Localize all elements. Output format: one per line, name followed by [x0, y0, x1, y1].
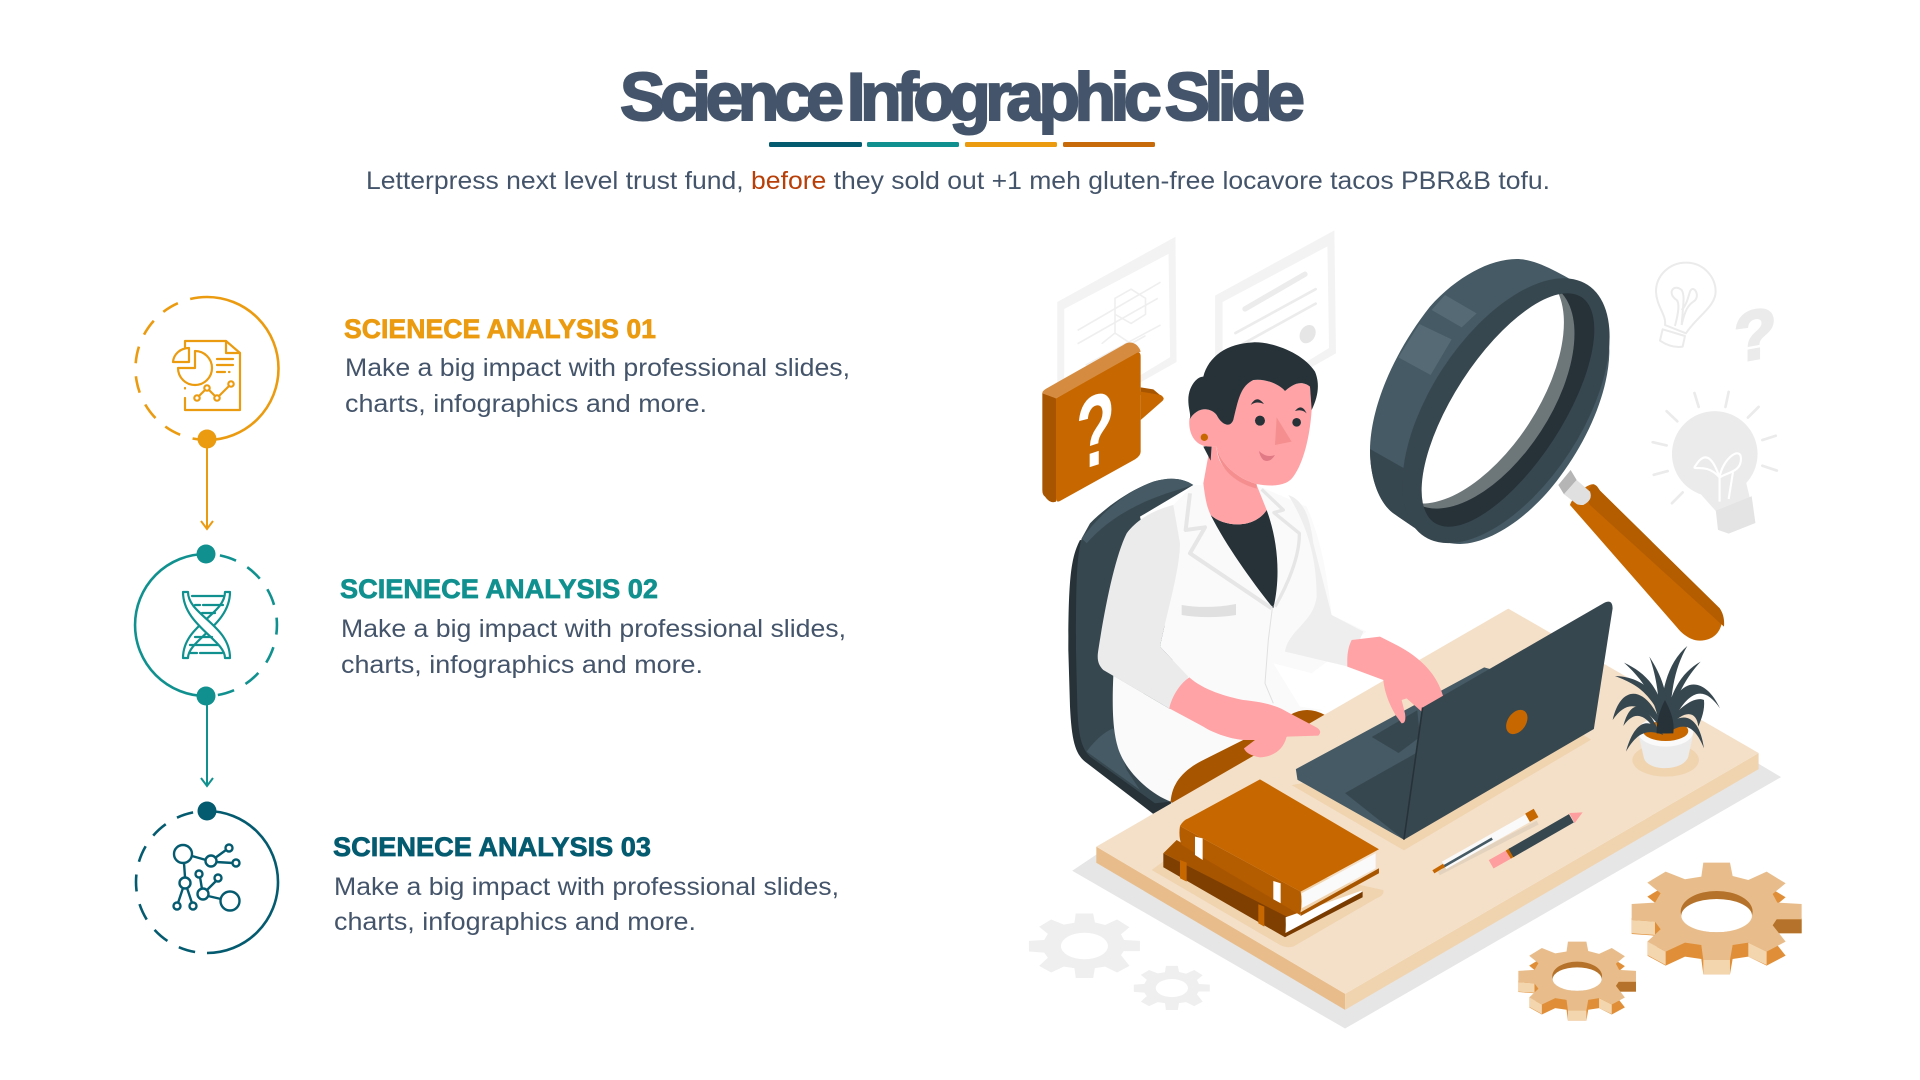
shirt: [1211, 510, 1278, 608]
right sleeve: [1285, 495, 1363, 667]
lens: [1422, 293, 1594, 527]
subtitle: Letterpress next level trust fund, before they sold out +1 meh gluten-free locavore tacos PBR&B tofu.: [366, 167, 1550, 195]
icon: network nodes: [174, 844, 240, 910]
books shadow: [1152, 847, 1384, 947]
metal connector light: [1564, 480, 1591, 505]
pocket: [1182, 604, 1236, 617]
wall frame with certificate: [1215, 230, 1336, 421]
title: Science Infographic Slide: [620, 59, 1305, 135]
arrow 2: [201, 702, 213, 786]
plant: [1613, 646, 1720, 777]
gray question mark: ?: [1734, 292, 1777, 377]
step 1 circle: [136, 297, 278, 448]
orange gear large: [1632, 863, 1802, 974]
neck shadow: [1217, 447, 1257, 489]
body 2: Make a big impact with professional slides,: [341, 615, 846, 643]
laptop screen: [1404, 602, 1613, 840]
face: [1189, 380, 1312, 485]
near hand: [1169, 677, 1320, 757]
title underline bars: [769, 142, 1155, 147]
metal connector: [1558, 470, 1577, 494]
handle shaded side: [1588, 484, 1724, 627]
heading 2: SCIENECE ANALYSIS 02: [340, 574, 658, 604]
outlined light bulb: [1656, 263, 1716, 347]
ring outer: [1370, 259, 1609, 544]
mouth: [1259, 451, 1275, 461]
speech bubble with question mark: [1042, 342, 1164, 502]
gray gear large: [1029, 914, 1140, 978]
center seam: [1265, 608, 1273, 703]
eyes and brows: [1251, 399, 1307, 427]
icon: report document with pie chart: [173, 341, 240, 410]
neck: [1203, 447, 1267, 524]
step 2 circle: [135, 544, 277, 706]
top book: [1179, 779, 1379, 916]
left sleeve: [1098, 505, 1188, 709]
chair seat and legs: [1171, 710, 1325, 803]
magnifying glass: [1370, 259, 1724, 641]
scientist body: [1098, 342, 1367, 803]
orange gear small: [1518, 942, 1636, 1021]
ring front face: [1361, 243, 1651, 578]
speech bubble with question mark: ?: [1076, 368, 1115, 494]
ring lower shade: [1370, 449, 1417, 529]
handle: [1570, 484, 1722, 641]
gray gear small: [1134, 966, 1210, 1010]
illustration: scientist at desk: [1029, 230, 1802, 1029]
body 1 line 2: charts, infographics and more.: [345, 390, 707, 418]
books: [1152, 779, 1384, 947]
body 1: Make a big impact with professional slides,: [345, 354, 850, 382]
filled light bulb with rays: [1653, 392, 1777, 534]
body 3 line 2: charts, infographics and more.: [334, 908, 696, 936]
bottom book: [1163, 840, 1363, 937]
lapels: [1186, 489, 1299, 608]
heading 3: SCIENECE ANALYSIS 03: [333, 832, 651, 862]
body 3: Make a big impact with professional slides,: [334, 873, 839, 901]
desk shadow: [1072, 764, 1781, 1029]
nose: [1275, 417, 1292, 445]
desk: [1096, 609, 1759, 1010]
ring highlights: [1398, 295, 1477, 375]
icon: DNA helix: [183, 592, 230, 658]
typing hand: [1347, 637, 1443, 723]
pencils: [1433, 812, 1583, 873]
hair behind neck: [1203, 445, 1212, 461]
office chair: [1068, 479, 1193, 814]
laptop base: [1296, 667, 1498, 840]
lab coat: [1113, 485, 1367, 802]
body 2 line 2: charts, infographics and more.: [341, 651, 703, 679]
step 3 circle: [136, 802, 278, 953]
wall frame with molecule: [1057, 237, 1177, 429]
earring: [1201, 434, 1208, 441]
hair: [1188, 342, 1318, 425]
heading 1: SCIENECE ANALYSIS 01: [344, 314, 656, 344]
arrow 1: [201, 445, 213, 529]
